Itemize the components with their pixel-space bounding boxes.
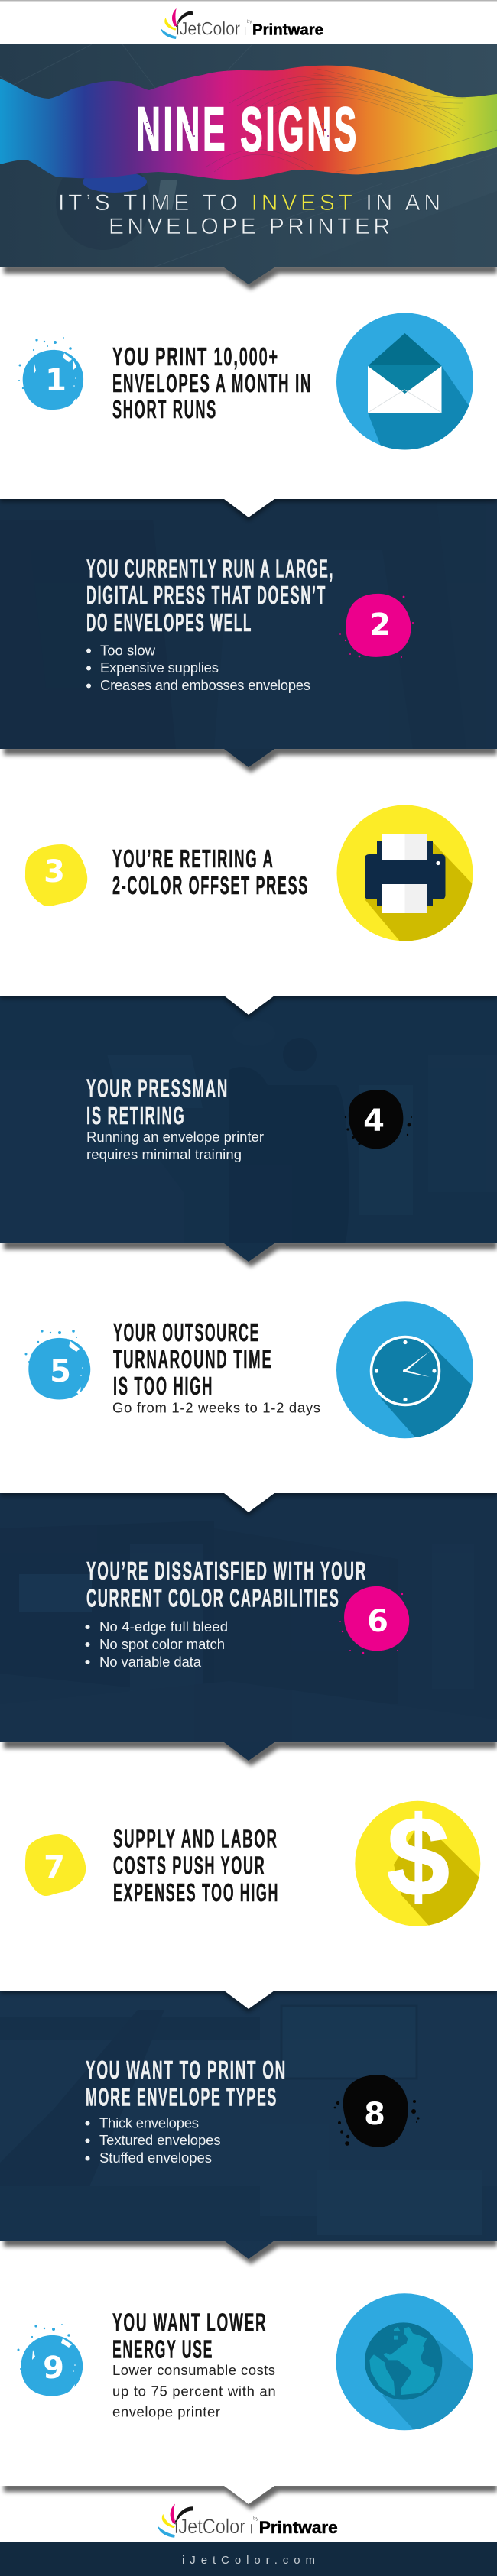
hero background photo	[0, 44, 497, 289]
icon: dollar coin	[355, 1800, 480, 1926]
subtitle line 2: ENVELOPE PRINTER	[109, 214, 390, 239]
sign 8 background photo	[0, 1987, 497, 2262]
shadow: sign 8	[4, 2237, 497, 2264]
badge 5: 5	[50, 1354, 71, 1389]
title speckle texture	[145, 122, 329, 137]
shadow: sign 4	[4, 1240, 497, 1267]
heading	[86, 2060, 284, 2106]
body text	[86, 1129, 264, 1162]
heading	[86, 559, 332, 631]
heading	[113, 1825, 279, 1907]
heading	[86, 1562, 365, 1607]
heading	[112, 844, 309, 899]
heading: YOU’RE RETIRING A	[112, 844, 274, 873]
heading	[112, 342, 312, 423]
heading	[86, 1079, 226, 1125]
footer logo divider	[250, 2524, 252, 2533]
panel: sign 9	[0, 2293, 497, 2504]
bullet list: No variable data	[99, 1654, 202, 1670]
badge 3	[25, 844, 87, 906]
footer wordmark Printware: Printware	[259, 2518, 338, 2537]
heading: YOUR OUTSOURCE	[113, 1318, 260, 1346]
badge 2: 2	[369, 608, 391, 643]
hero rainbow wave	[0, 66, 497, 180]
logo wordmark Printware: Printware	[252, 22, 323, 39]
badge 1	[18, 337, 83, 410]
badge 6: 6	[367, 1604, 388, 1639]
panel: sign 7	[24, 1800, 480, 1926]
badge 8: 8	[364, 2097, 385, 2132]
badge 8	[334, 2075, 420, 2147]
body text	[112, 2362, 276, 2420]
top rule	[0, 0, 497, 2]
bullet list: Textured envelopes	[99, 2132, 221, 2148]
icon: globe	[336, 2293, 473, 2430]
icon: clock	[336, 1301, 473, 1438]
heading: 2-COLOR OFFSET PRESS	[112, 871, 309, 899]
heading: EXPENSES TOO HIGH	[113, 1878, 279, 1907]
footer bar	[0, 2542, 497, 2576]
footer logo	[158, 2504, 338, 2538]
bullet list: No spot color match	[99, 1636, 225, 1652]
badge 7: 7	[44, 1850, 65, 1885]
bullet list: Too slow	[100, 642, 156, 659]
bullet list: Expensive supplies	[100, 659, 219, 676]
header logo	[161, 8, 323, 40]
heading: YOU PRINT 10,000+	[112, 342, 279, 371]
panel: hero	[0, 44, 497, 289]
badge 9: 9	[43, 2351, 64, 2386]
footer logo by mark: by	[253, 2516, 259, 2522]
sign 2 background photo	[0, 497, 497, 772]
heading: SUPPLY AND LABOR	[113, 1825, 278, 1852]
subtitle line 1: IT’S TIME TO INVEST IN AN	[58, 190, 440, 215]
bullet list: Stuffed envelopes	[99, 2150, 212, 2166]
footer logo swoosh	[158, 2504, 193, 2538]
panel: sign 6	[0, 1490, 497, 1765]
heading: ENVELOPES A MONTH IN	[112, 369, 312, 397]
heading	[113, 1318, 272, 1400]
badge 4	[345, 1090, 412, 1149]
shadow: sign 9 panel	[4, 2483, 497, 2510]
bullet list: No 4-edge full bleed	[99, 1619, 228, 1635]
logo by mark: by	[247, 20, 252, 24]
heading: IS TOO HIGH	[113, 1372, 213, 1400]
heading: IS RETIRING	[86, 1101, 185, 1129]
badge 2	[339, 594, 414, 658]
panel: sign 1	[18, 313, 473, 449]
bullet list: Creases and embosses envelopes	[100, 677, 310, 693]
panel: sign 2	[0, 497, 497, 772]
panel: sign 5	[24, 1301, 473, 1438]
bullet list: Thick envelopes	[99, 2115, 199, 2130]
badge 7	[25, 1834, 86, 1896]
badge 9	[17, 2324, 83, 2396]
icon: envelope	[336, 313, 473, 449]
body text: Go from 1-2 weeks to 1-2 days	[112, 1400, 320, 1415]
hero wave line texture	[206, 69, 497, 172]
shadow: sign 6	[4, 1739, 497, 1766]
website url: iJetColor.com	[182, 2554, 315, 2567]
heading: ENERGY USE	[112, 2335, 213, 2364]
shadow: sign 2	[4, 746, 497, 773]
badge 3: 3	[44, 854, 65, 889]
bullet list	[86, 2115, 221, 2166]
panel: sign 8	[0, 1987, 497, 2262]
heading: YOU WANT LOWER	[112, 2309, 268, 2337]
badge 5	[24, 1330, 90, 1399]
heading: YOUR PRESSMAN	[86, 1074, 229, 1102]
footer wordmark iJetColor: iJetColor	[174, 2515, 245, 2538]
logo wordmark iJetColor: iJetColor	[176, 19, 240, 40]
badge 1: 1	[45, 363, 67, 398]
body text: Lower consumable costs	[112, 2362, 275, 2378]
heading: COSTS PUSH YOUR	[113, 1852, 265, 1880]
heading: MORE ENVELOPE TYPES	[86, 2083, 278, 2111]
panel: sign 4	[0, 993, 497, 1269]
logo divider	[244, 27, 246, 35]
logo swoosh	[161, 8, 193, 39]
heading: SHORT RUNS	[112, 395, 217, 423]
badge 6	[339, 1586, 409, 1654]
panel: sign 3	[25, 805, 489, 948]
subtitle	[58, 190, 440, 239]
icon: dollar coin: $	[387, 1794, 450, 1920]
sign 4 background photo	[0, 993, 497, 1269]
heading	[112, 2309, 268, 2364]
heading: DO ENVELOPES WELL	[86, 608, 252, 637]
icon: printer	[336, 805, 473, 941]
bullet list	[86, 642, 310, 693]
body text: Running an envelope printer	[86, 1129, 264, 1145]
heading: TURNAROUND TIME	[113, 1345, 272, 1373]
sign 6 background photo	[0, 1490, 497, 1765]
body text: up to 75 percent with an	[112, 2383, 276, 2399]
heading: YOU WANT TO PRINT ON	[86, 2056, 287, 2084]
shadow: hero	[4, 264, 497, 290]
badge 4: 4	[363, 1103, 385, 1139]
body text: envelope printer	[112, 2404, 220, 2420]
bullet list	[86, 1622, 227, 1667]
body text: requires minimal training	[86, 1146, 242, 1162]
